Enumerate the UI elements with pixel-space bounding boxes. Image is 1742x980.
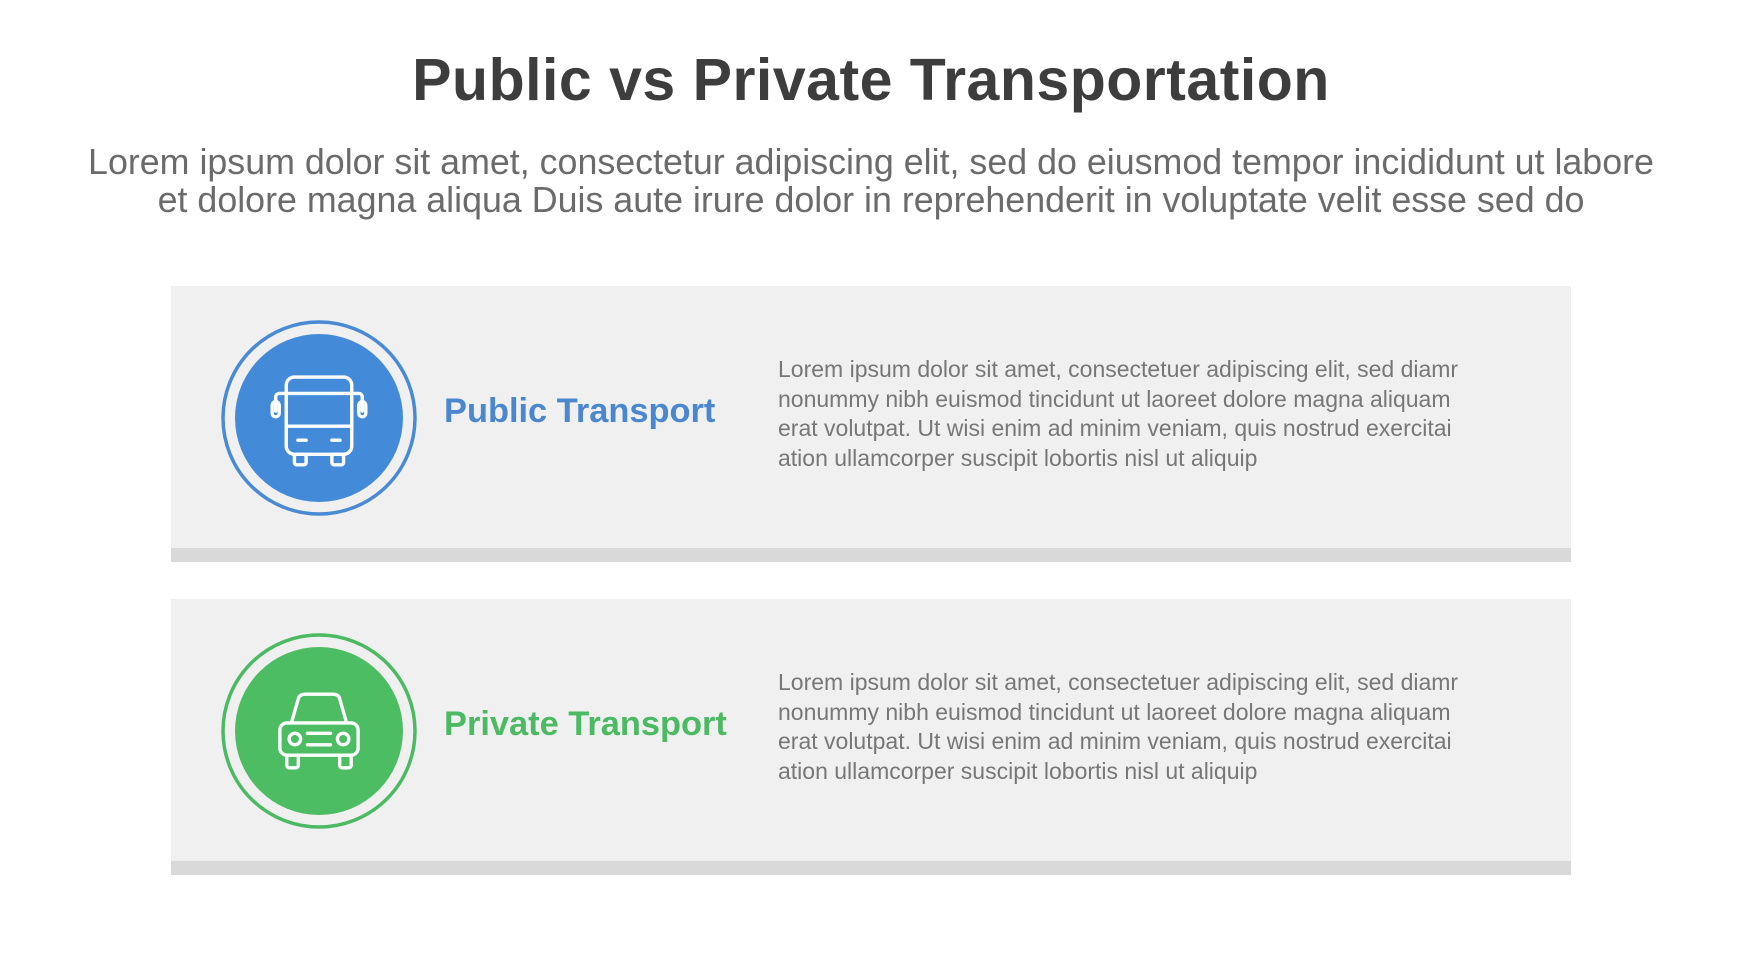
text block: private description: erat volutpat. Ut wisi enim ad minim veniam, quis nostrud exercitai: [778, 728, 1452, 754]
title: Public vs Private Transportation: [412, 47, 1330, 113]
subtitle: et dolore magna aliqua Duis aute irure dolor in reprehenderit in voluptate velit esse sed do: [158, 180, 1584, 220]
panel: public transport: [171, 286, 1571, 562]
text block: public description: nonummy nibh euismod tincidunt ut laoreet dolore magna aliquam: [778, 386, 1451, 412]
text block: private description: ation ullamcorper suscipit lobortis nisl ut aliquip: [778, 758, 1257, 784]
icon: car: [221, 633, 417, 829]
text block: private description: Lorem ipsum dolor sit amet, consectetuer adipiscing elit, sed diamr: [778, 669, 1458, 695]
text block: public description: ation ullamcorper suscipit lobortis nisl ut aliquip: [778, 445, 1257, 471]
text block: public description: Lorem ipsum dolor sit amet, consectetuer adipiscing elit, sed diamr: [778, 356, 1458, 382]
label: public transport: Public Transport: [444, 392, 715, 430]
label: private transport: Private Transport: [444, 705, 727, 743]
icon: bus: [221, 320, 417, 516]
panel: private transport: [171, 599, 1571, 875]
subtitle: [88, 142, 1654, 220]
text block: public description: erat volutpat. Ut wisi enim ad minim veniam, quis nostrud exercitai: [778, 415, 1452, 441]
subtitle: Lorem ipsum dolor sit amet, consectetur adipiscing elit, sed do eiusmod tempor incididunt ut labore: [88, 142, 1654, 182]
text block: private description: nonummy nibh euismod tincidunt ut laoreet dolore magna aliquam: [778, 699, 1451, 725]
text block: public description: [778, 356, 1458, 471]
text block: private description: [778, 669, 1458, 784]
